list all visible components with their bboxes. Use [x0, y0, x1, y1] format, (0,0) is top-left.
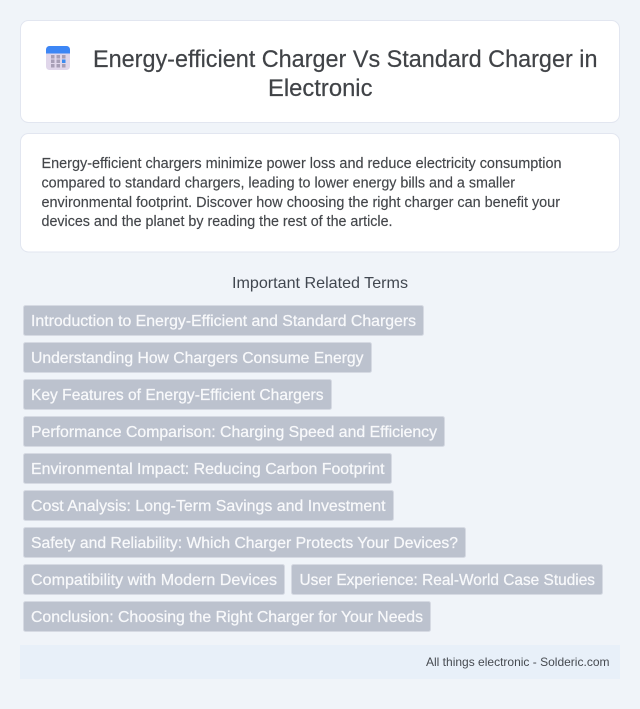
footer: All things electronic - Solderic.com	[426, 655, 610, 669]
tag: cost	[24, 490, 394, 520]
panel: introduction	[20, 134, 620, 252]
tag: safety: Safety and Reliability: Which Charger Protects Your Devices?	[31, 535, 458, 552]
title: Electronic	[268, 75, 372, 102]
tag: compatibility: Compatibility with Modern Devices	[31, 572, 277, 589]
intro paragraph	[42, 156, 562, 230]
tag: performance: Performance Comparison: Charging Speed and Efficiency	[31, 424, 437, 441]
tag: user experience: User Experience: Real-World Case Studies	[300, 572, 595, 589]
intro paragraph: compared to standard chargers, leading to lower energy bills and a smaller	[42, 176, 515, 192]
footer	[20, 645, 620, 679]
tag: cost: Cost Analysis: Long-Term Savings and Investment	[31, 498, 386, 515]
tag: key features: Key Features of Energy-Efficient Chargers	[31, 387, 324, 404]
icon: calendar	[46, 46, 70, 70]
tag: introduction	[24, 306, 424, 336]
tag: compatibility	[24, 564, 284, 594]
tag: understanding	[24, 342, 372, 372]
tag: understanding: Understanding How Chargers Consume Energy	[31, 350, 364, 367]
tag: conclusion	[24, 602, 430, 632]
header panel	[20, 20, 620, 122]
intro paragraph: Energy-efficient chargers minimize power loss and reduce electricity consumption	[42, 156, 562, 172]
tag list	[24, 306, 602, 632]
tag: key features	[24, 380, 332, 410]
tag: environmental: Environmental Impact: Reducing Carbon Footprint	[31, 461, 385, 478]
title	[93, 46, 598, 102]
tag: safety	[24, 528, 466, 558]
title: Energy-efficient Charger Vs Standard Charger in	[93, 46, 598, 73]
heading: important related terms: Important Related Terms	[232, 275, 408, 292]
intro paragraph: environmental footprint. Discover how choosing the right charger can benefit your	[42, 195, 560, 211]
tag: environmental	[24, 454, 392, 484]
intro paragraph: devices and the planet by reading the rest of the article.	[42, 214, 392, 230]
tag: introduction: Introduction to Energy-Efficient and Standard Chargers	[31, 313, 416, 330]
tag: conclusion: Conclusion: Choosing the Right Charger for Your Needs	[31, 609, 423, 626]
tag: user experience	[292, 564, 602, 594]
tag: performance	[24, 416, 444, 446]
